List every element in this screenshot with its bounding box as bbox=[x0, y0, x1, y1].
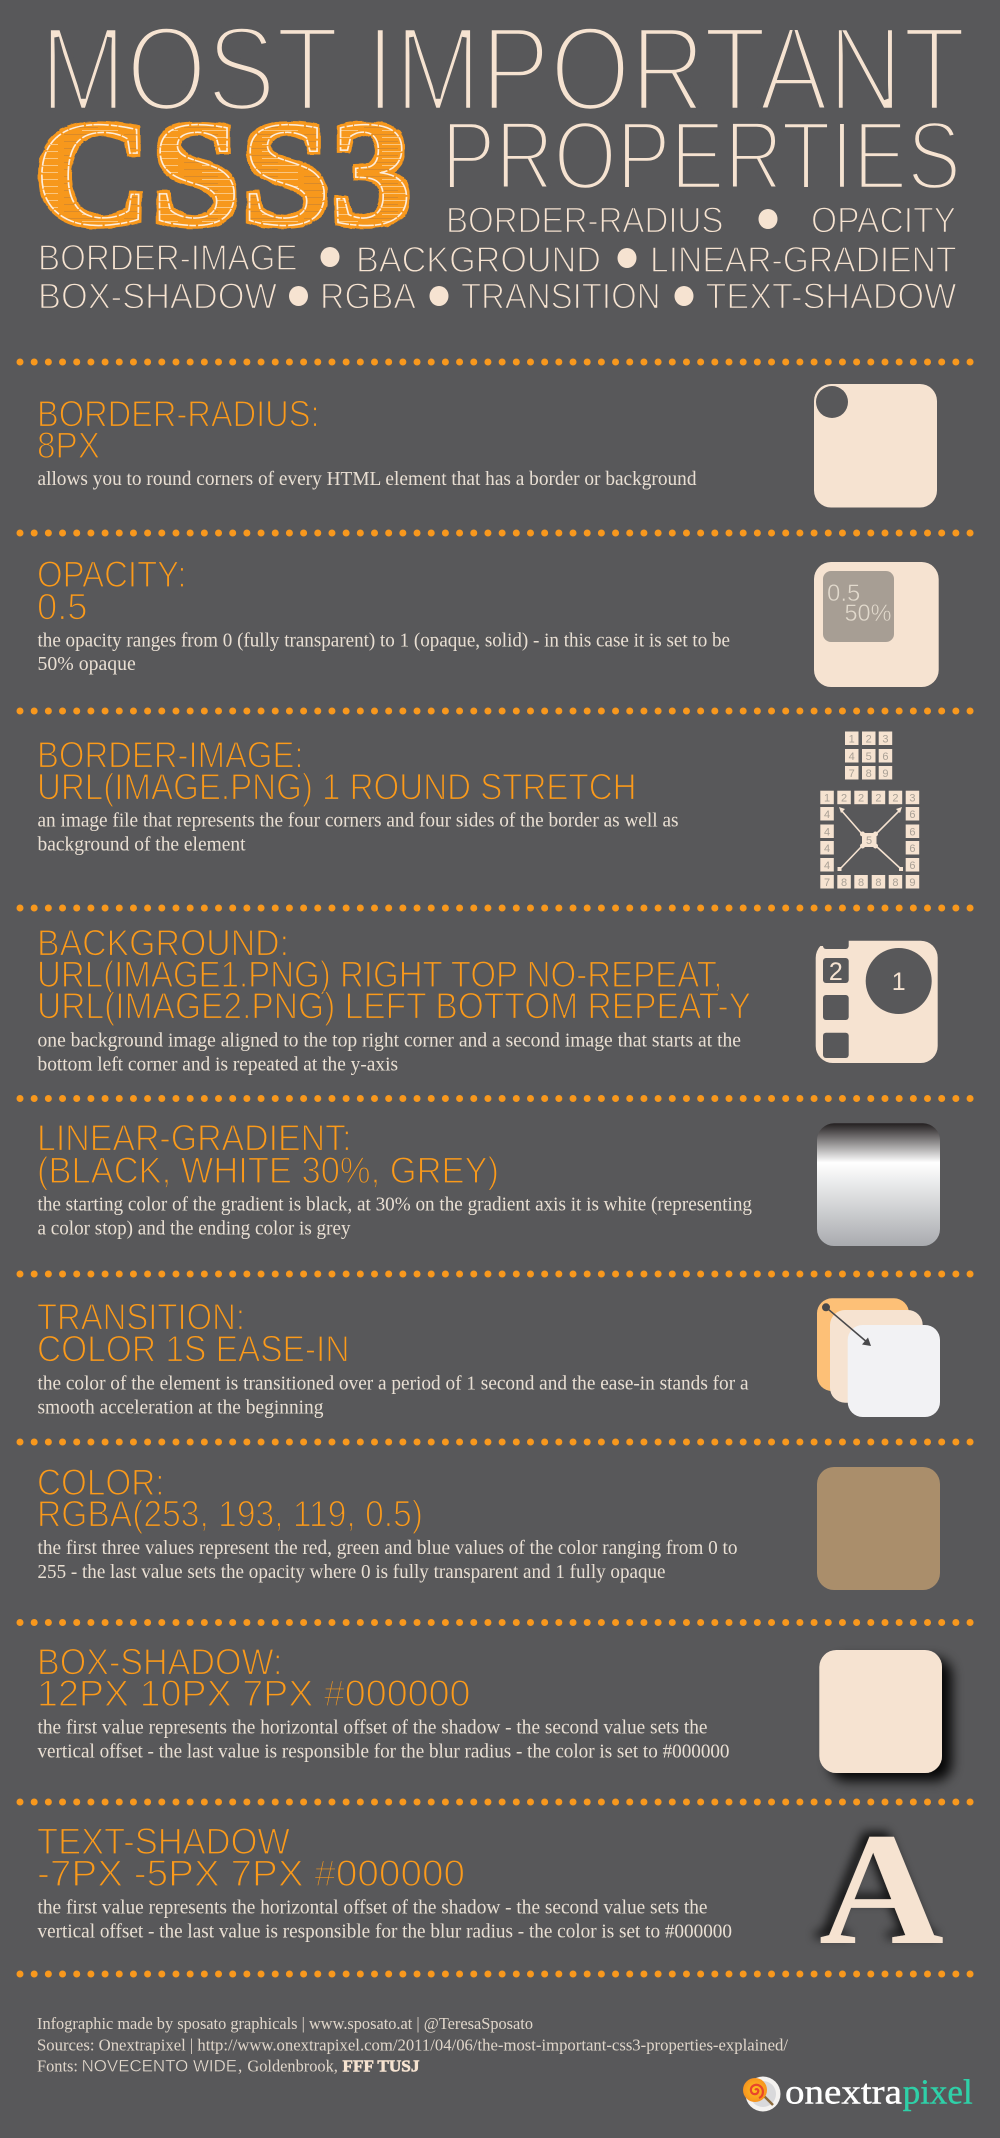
heading: box-shadow: BOX-SHADOW: bbox=[37, 1640, 282, 1682]
icon: nine-slice grid: 7 bbox=[849, 768, 855, 780]
icon: lollipop magnifier bbox=[743, 2076, 780, 2112]
heading: color: COLOR: bbox=[37, 1461, 164, 1503]
property list in header: RGBA bbox=[320, 276, 417, 316]
description: allows you to round corners of every HTML element that has a border or background bbox=[38, 468, 696, 490]
description: vertical offset - the last value is responsible for the blur radius - the color is set to #000000 bbox=[38, 1920, 732, 1942]
icon: background images: 1 bbox=[892, 968, 906, 996]
icon: nine-slice grid: 4 bbox=[824, 860, 830, 872]
description: smooth acceleration at the beginning bbox=[38, 1396, 324, 1418]
value: rgba: RGBA(253, 193, 119, 0.5) bbox=[37, 1492, 423, 1534]
heading: border-radius: BORDER-RADIUS: bbox=[37, 392, 320, 434]
value: image1 and image2 bbox=[37, 953, 751, 1026]
value: text-shadow offsets: -7PX -5PX 7PX #000000 bbox=[37, 1852, 465, 1894]
icon: nine-slice grid: 2 bbox=[866, 734, 872, 746]
icon: half-opaque square bbox=[814, 562, 939, 687]
footer credits: Sources: Onextrapixel | http://www.onextrapixel.com/2011/04/06/the-most-important-css3-properties-explained/ bbox=[37, 2036, 788, 2055]
description: the color of the element is transitioned over a period of 1 second and the ease-in stands for a bbox=[38, 1372, 749, 1394]
logo wordmark: onextra bbox=[785, 2072, 903, 2111]
description: the first value represents the horizontal offset of the shadow - the second value sets the bbox=[38, 1896, 708, 1918]
heading: opacity: OPACITY: bbox=[37, 553, 186, 595]
value: image1 and image2: URL(IMAGE1.PNG) RIGHT TOP NO-REPEAT, bbox=[37, 953, 722, 995]
footer credits: FFF TUSJ bbox=[342, 2057, 420, 2076]
icon: half-opaque square: 0.5 bbox=[827, 580, 860, 607]
icon: nine-slice grid: 6 bbox=[882, 751, 888, 763]
panel: border-radius bbox=[37, 384, 937, 508]
icon: letter A with text shadow: A bbox=[819, 1800, 944, 1978]
panel: linear-gradient bbox=[37, 1116, 940, 1246]
value: color 1s ease-in: COLOR 1S EASE-IN bbox=[37, 1328, 350, 1370]
logo: onextrapixel: pixel bbox=[903, 2072, 973, 2111]
value: url image: URL(IMAGE.PNG) 1 ROUND STRETCH bbox=[37, 766, 636, 808]
description: 255 - the last value sets the opacity where 0 is fully transparent and 1 fully opaque bbox=[38, 1561, 666, 1583]
icon: nine-slice grid bbox=[820, 732, 919, 889]
heading: border-image: BORDER-IMAGE: bbox=[37, 733, 304, 775]
footer credits: Fonts: bbox=[37, 2057, 78, 2076]
panel: text-shadow bbox=[37, 1800, 944, 1978]
description: 50% opaque bbox=[38, 653, 136, 675]
property list in header bbox=[38, 200, 957, 316]
property list in header: TEXT-SHADOW bbox=[706, 276, 957, 316]
icon: nine-slice grid: 9 bbox=[909, 877, 915, 889]
description: the opacity ranges from 0 (fully transparent) to 1 (opaque, solid) - in this case it is set to be bbox=[38, 630, 730, 652]
description: vertical offset - the last value is responsible for the blur radius - the color is set to #000000 bbox=[38, 1740, 730, 1762]
icon: nine-slice grid: 5 bbox=[866, 835, 872, 847]
icon: rounded square with corner circle bbox=[814, 384, 937, 508]
icon: stacked transition squares with arrow bbox=[817, 1298, 940, 1417]
property list in header: OPACITY bbox=[811, 200, 956, 240]
icon: nine-slice grid: 1 bbox=[849, 734, 855, 746]
icon: nine-slice grid: 4 bbox=[824, 826, 830, 838]
property list in header: BOX-SHADOW bbox=[38, 276, 278, 316]
icon: background images bbox=[815, 932, 938, 1063]
description: the first three values represent the red, green and blue values of the color ranging from 0 to bbox=[38, 1537, 738, 1559]
heading: text-shadow: TEXT-SHADOW bbox=[37, 1820, 291, 1862]
value: 8px: 8PX bbox=[37, 424, 100, 466]
property list in header: TRANSITION bbox=[461, 276, 660, 316]
icon: gradient square bbox=[817, 1123, 940, 1246]
icon: nine-slice grid: 4 bbox=[849, 751, 855, 763]
property list in header: BORDER-RADIUS bbox=[446, 200, 724, 240]
icon: nine-slice grid: 2 bbox=[858, 793, 864, 805]
icon: nine-slice grid: 8 bbox=[866, 768, 872, 780]
icon: semi-transparent colour square bbox=[817, 1467, 940, 1590]
icon: nine-slice grid: 8 bbox=[841, 877, 847, 889]
icon: background images: 2 bbox=[829, 958, 843, 986]
description: bottom left corner and is repeated at the y-axis bbox=[38, 1054, 398, 1076]
icon: nine-slice grid: 2 bbox=[841, 793, 847, 805]
panel: border-image bbox=[37, 732, 919, 889]
panel: opacity bbox=[37, 553, 939, 687]
footer credits: Infographic made by sposato graphicals | www.sposato.at | @TeresaSposato bbox=[37, 2014, 533, 2033]
value: box-shadow offsets: 12PX 10PX 7PX #000000 bbox=[37, 1672, 471, 1714]
description: one background image aligned to the top right corner and a second image that starts at the bbox=[38, 1030, 741, 1052]
icon: nine-slice grid: 5 bbox=[866, 751, 872, 763]
property list in header: BORDER-IMAGE bbox=[38, 237, 298, 278]
icon: nine-slice grid: 6 bbox=[909, 826, 915, 838]
footer credits: NOVECENTO WIDE bbox=[82, 2058, 237, 2076]
description: background of the element bbox=[38, 834, 246, 856]
footer credits: , bbox=[238, 2057, 242, 2076]
title: CSS3 sketched: CSS3 bbox=[34, 91, 412, 257]
description: a color stop) and the ending color is grey bbox=[38, 1217, 350, 1239]
icon: nine-slice grid: 6 bbox=[909, 809, 915, 821]
panel: background bbox=[37, 922, 938, 1076]
footer credits: Goldenbrook, bbox=[247, 2057, 338, 2076]
icon: nine-slice grid: 2 bbox=[875, 793, 881, 805]
value: black white grey: (BLACK, WHITE 30%, GREY) bbox=[37, 1149, 499, 1191]
description: the first value represents the horizontal offset of the shadow - the second value sets the bbox=[38, 1716, 708, 1738]
property list in header: LINEAR-GRADIENT bbox=[650, 239, 956, 280]
icon: nine-slice grid: 8 bbox=[875, 877, 881, 889]
icon: nine-slice grid: 6 bbox=[909, 843, 915, 855]
heading: linear-gradient: LINEAR-GRADIENT: bbox=[37, 1116, 352, 1158]
icon: nine-slice grid: 8 bbox=[892, 877, 898, 889]
value: image1 and image2: URL(IMAGE2.PNG) LEFT BOTTOM REPEAT-Y bbox=[37, 984, 751, 1026]
icon: nine-slice grid: 8 bbox=[858, 877, 864, 889]
icon: nine-slice grid: 6 bbox=[909, 860, 915, 872]
icon: nine-slice grid: 3 bbox=[909, 793, 915, 805]
panel: box-shadow bbox=[37, 1640, 942, 1773]
panel: transition bbox=[37, 1296, 940, 1418]
icon: nine-slice grid: 1 bbox=[824, 793, 830, 805]
value: 0.5: 0.5 bbox=[37, 586, 88, 628]
icon: nine-slice grid: 4 bbox=[824, 809, 830, 821]
icon: nine-slice grid: 9 bbox=[882, 768, 888, 780]
heading: transition: TRANSITION: bbox=[37, 1296, 245, 1338]
icon: nine-slice grid: 3 bbox=[882, 734, 888, 746]
footer credits bbox=[37, 2014, 788, 2076]
property list in header: BACKGROUND bbox=[356, 239, 601, 280]
icon: half-opaque square: 50% bbox=[844, 600, 892, 627]
description: an image file that represents the four corners and four sides of the border as well as bbox=[38, 810, 679, 832]
heading: background: BACKGROUND: bbox=[37, 922, 289, 964]
icon: nine-slice grid: 4 bbox=[824, 843, 830, 855]
icon: square with drop shadow bbox=[819, 1650, 942, 1773]
description: the starting color of the gradient is black, at 30% on the gradient axis it is white (representing bbox=[38, 1194, 752, 1216]
icon: nine-slice grid: 2 bbox=[892, 793, 898, 805]
icon: nine-slice grid: 7 bbox=[824, 877, 830, 889]
panel: color rgba bbox=[37, 1461, 940, 1590]
logo: onextrapixel bbox=[743, 2072, 973, 2112]
